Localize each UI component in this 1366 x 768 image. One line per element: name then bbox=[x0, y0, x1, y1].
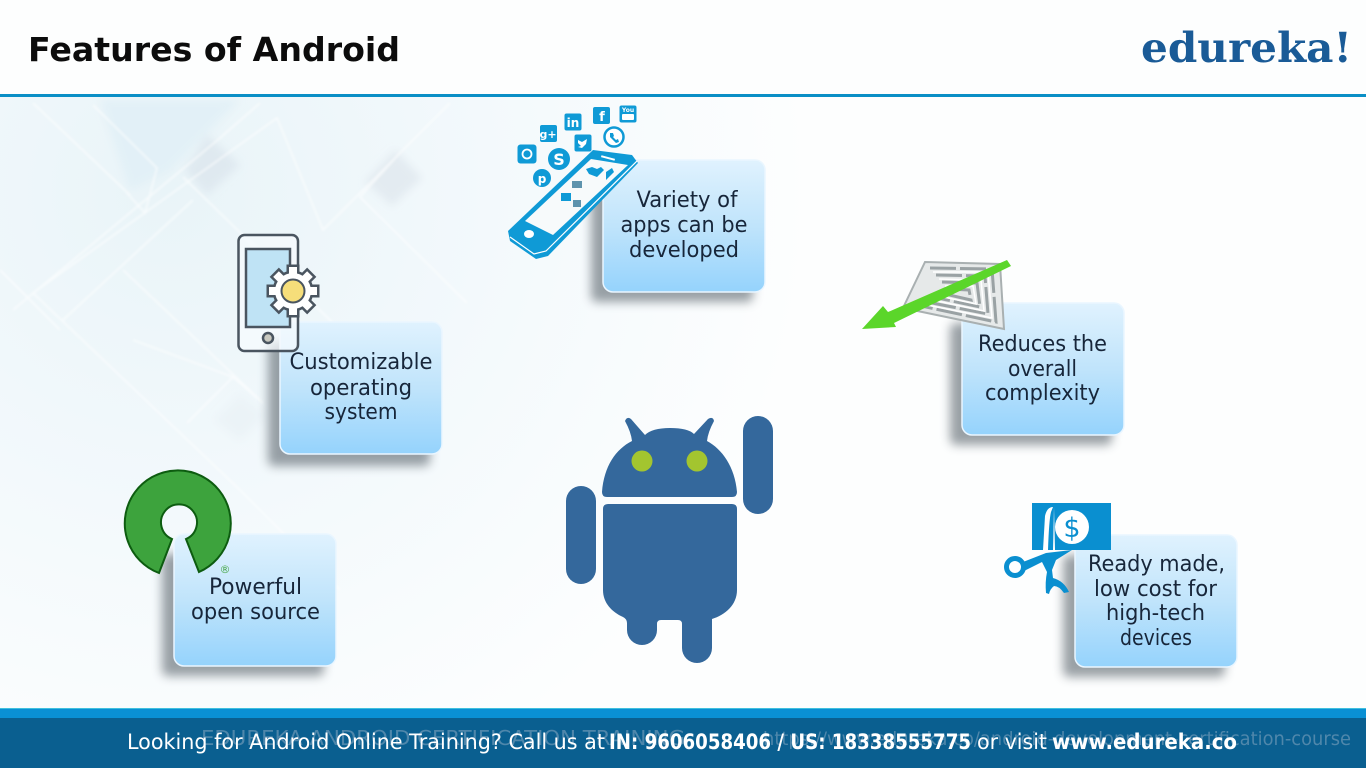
icon: phone with gear bbox=[238, 235, 317, 351]
card: ready made low cost bbox=[1063, 535, 1237, 677]
card: reduces complexity bbox=[950, 303, 1124, 445]
icon: open source logo: ® bbox=[220, 563, 230, 576]
footer bar bbox=[0, 708, 1366, 768]
footer bar: Looking for Android Online Training? Call us at bbox=[127, 730, 605, 754]
card: variety of apps: apps can be bbox=[620, 213, 748, 238]
footer bar: IN: 9606058406 / US: 18338555775 bbox=[609, 730, 971, 754]
footer bar: or visit bbox=[977, 730, 1047, 754]
icon: phone with social apps: in bbox=[567, 116, 579, 130]
icon: phone with social apps: S bbox=[553, 150, 565, 169]
card: ready made low cost: high-tech bbox=[1106, 601, 1205, 626]
icon: open source logo bbox=[125, 470, 231, 576]
card: customizable operating system: system bbox=[324, 400, 398, 425]
card: customizable operating system: Customizable bbox=[290, 350, 432, 375]
card: ready made low cost: Ready made, bbox=[1088, 552, 1225, 577]
card: ready made low cost: low cost for bbox=[1094, 577, 1218, 602]
card: powerful open source: open source bbox=[191, 600, 320, 625]
icon: phone with social apps bbox=[508, 106, 638, 259]
footer bar: EDUREKA ANDROID CERTIFICATION TRAINING bbox=[201, 726, 685, 750]
card: reduces complexity: overall bbox=[1008, 357, 1077, 382]
card: customizable operating system bbox=[268, 322, 442, 466]
card: variety of apps bbox=[591, 160, 765, 302]
card: reduces complexity: Reduces the bbox=[978, 332, 1107, 357]
card: variety of apps: developed bbox=[629, 238, 739, 263]
card: reduces complexity: complexity bbox=[985, 381, 1100, 406]
icon: phone with social apps: You bbox=[621, 107, 634, 114]
icon: maze with green arrow bbox=[862, 260, 1011, 329]
header rule bbox=[0, 94, 1366, 97]
card: ready made low cost: devices bbox=[1120, 626, 1192, 651]
card: customizable operating system: operating bbox=[310, 376, 412, 401]
android mascot bbox=[566, 416, 773, 663]
icon: scissors cutting dollar bill: $ bbox=[1063, 513, 1081, 544]
card: powerful open source bbox=[162, 534, 336, 676]
icon: scissors cutting dollar bill bbox=[1006, 503, 1111, 594]
footer bar: www.edureka.co bbox=[1052, 730, 1237, 754]
card: powerful open source: Powerful bbox=[209, 575, 302, 600]
icon: phone with social apps: p bbox=[538, 172, 547, 186]
logo: edureka: edureka! bbox=[1141, 24, 1352, 72]
icon: phone with social apps: f bbox=[599, 110, 605, 125]
icon: phone with social apps: g+ bbox=[539, 128, 557, 141]
card: variety of apps: Variety of bbox=[636, 188, 739, 213]
title: Features of Android bbox=[28, 30, 400, 69]
